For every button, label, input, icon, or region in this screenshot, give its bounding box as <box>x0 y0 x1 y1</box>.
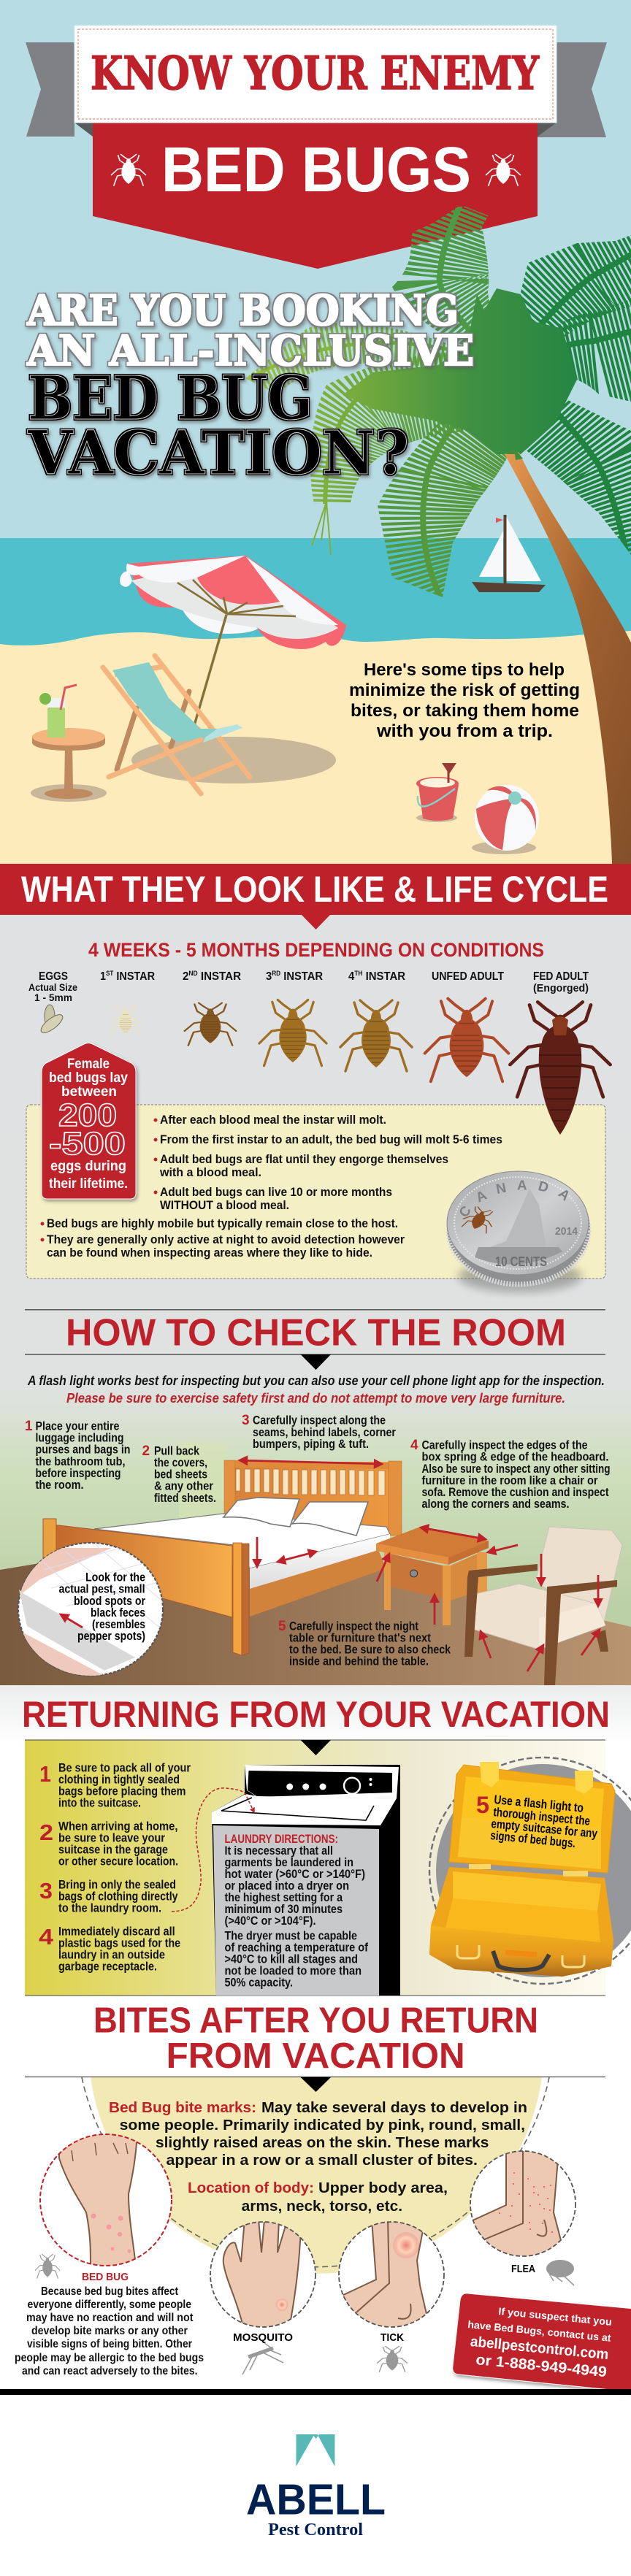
step 3 text <box>242 1413 396 1451</box>
icon: bed bug left <box>111 154 146 185</box>
stage labels: ST <box>106 970 114 977</box>
suitcase step text <box>476 1792 598 1850</box>
laundry directions: >40°C to kill all stages and <box>225 1952 358 1966</box>
returning steps: laundry in an outside <box>58 1948 165 1962</box>
returning steps: clothing in tightly sealed <box>58 1773 180 1787</box>
fact bullets: can be found when inspecting areas where they like to hide. <box>47 1246 372 1260</box>
stage labels: EGGS <box>39 970 68 983</box>
side table with drink <box>31 685 107 802</box>
sailboat <box>472 515 546 592</box>
step 4 text: 4 <box>410 1438 418 1453</box>
laundry directions: 50% capacity. <box>225 1976 293 1990</box>
step numbers <box>39 1761 54 1950</box>
bed bug bite note: everyone differently, some people <box>28 2299 191 2311</box>
callout: mattress closeup <box>15 1541 164 1676</box>
heading: bites after you return: FROM VACATION <box>167 2036 465 2076</box>
icon: bed bug on coin <box>460 1205 498 1234</box>
icon: second instar <box>185 1003 236 1046</box>
grey ribbon tails <box>26 42 607 137</box>
bed bug bite note: may have no reaction and will not <box>26 2312 194 2324</box>
panel: returning background <box>0 1685 631 1744</box>
panel: look and life cycle background <box>0 915 631 1686</box>
returning steps: When arriving at home, <box>58 1820 178 1833</box>
headline line 1: ARE YOU BOOKING <box>26 286 459 335</box>
laundry directions: minimum of 30 minutes <box>225 1902 343 1916</box>
stage labels: 4 <box>348 970 355 983</box>
step 1 text: the bathroom tub, <box>35 1455 126 1468</box>
bite marks text: arms, neck, torso, etc. <box>242 2199 402 2215</box>
stage labels: 1 <box>100 970 107 983</box>
bite marks text: slightly raised areas on the skin. These marks <box>156 2135 489 2151</box>
step 5 text: inside and behind the table. <box>289 1655 429 1668</box>
fact bullets <box>47 1113 502 1260</box>
callout: eggs laid: their lifetime. <box>49 1176 128 1192</box>
stage labels: UNFED ADULT <box>432 970 504 983</box>
coin with bed bug for scale <box>445 1171 592 1297</box>
laundry directions: of reaching a temperature of <box>225 1941 368 1955</box>
step numbers: 3 <box>39 1878 53 1904</box>
coin with bed bug for scale: CANADA <box>460 1180 568 1216</box>
step 4 text <box>410 1438 611 1511</box>
laundry directions: The dryer must be capable <box>225 1929 357 1943</box>
bite marks text: appear in a row or a small cluster of bites. <box>167 2153 478 2169</box>
step 5 text: 5 <box>278 1619 286 1634</box>
stage labels: INSTAR <box>280 970 323 983</box>
fact bullets: Adult bed bugs can live 10 or more months <box>160 1185 392 1199</box>
callout: eggs laid: eggs during <box>50 1159 126 1174</box>
step numbers: 1 <box>39 1761 51 1787</box>
fact bullets: WITHOUT a blood meal. <box>160 1198 289 1212</box>
intro text: minimize the risk of getting <box>349 681 580 700</box>
returning steps: be sure to leave your <box>58 1831 165 1845</box>
stage labels: 2 <box>183 970 189 983</box>
bucket and shovel <box>416 763 459 822</box>
callout: eggs laid: bed bugs lay <box>49 1070 128 1086</box>
laundry directions: the highest setting for a <box>225 1890 343 1904</box>
step 2 text: Pull back <box>154 1444 200 1457</box>
returning steps: plastic bags used for the <box>58 1936 180 1950</box>
icon: fed adult <box>510 1002 611 1135</box>
icon: tick <box>377 2346 408 2372</box>
stage labels: FED ADULT <box>533 970 589 983</box>
logo: abell pest control: ABELL <box>246 2475 386 2523</box>
suitcase step text: empty suitcase for any <box>491 1817 598 1841</box>
contact card <box>453 2293 631 2392</box>
coin with bed bug for scale: 2014 <box>555 1225 578 1238</box>
step 5 text <box>278 1619 451 1668</box>
returning steps: bags of clothing directly <box>58 1890 178 1904</box>
step 2 text: bed sheets <box>154 1468 207 1481</box>
step 3 text: Carefully inspect along the <box>253 1414 386 1427</box>
side rail <box>250 1550 386 1617</box>
step 5 text: table or furniture that's next <box>289 1632 431 1645</box>
suitcase step text: 5 <box>476 1792 489 1818</box>
returning steps: or other secure location. <box>58 1855 178 1868</box>
mattress top <box>94 1514 390 1568</box>
heading: know your enemy: KNOW YOUR ENEMY <box>91 46 540 100</box>
callout: eggs laid: Female <box>67 1057 110 1072</box>
icon: first instar <box>109 1005 142 1035</box>
coin with bed bug for scale: 10 CENTS <box>495 1254 547 1269</box>
label: flea: FLEA <box>511 2263 535 2275</box>
returning steps: bags before placing them <box>58 1785 186 1798</box>
heading: life cycle duration: 4 WEEKS - 5 MONTHS DEPENDING ON CONDITIONS <box>88 939 544 961</box>
returning steps: into the suitcase. <box>58 1796 141 1810</box>
stage labels: RD <box>272 970 281 977</box>
intro instructions <box>27 1373 605 1406</box>
callout: eggs laid: between <box>61 1084 117 1100</box>
returning steps: Bring in only the sealed <box>58 1878 176 1892</box>
contact card: abellpestcontrol.com <box>470 2334 609 2363</box>
label: tick: TICK <box>380 2331 404 2344</box>
logo mark <box>297 2434 334 2466</box>
contact card: If you suspect that you <box>498 2305 613 2328</box>
callout: mattress closeup: pepper spots) <box>77 1630 145 1643</box>
contact card: or 1-888-949-4949 <box>475 2352 608 2380</box>
headboard <box>235 1462 389 1535</box>
returning steps: to the laundry room. <box>58 1901 161 1915</box>
washing machine <box>172 1765 400 1996</box>
panel: returning <box>25 1740 605 1996</box>
step 2 text <box>142 1444 216 1505</box>
returning steps: suitcase in the garage <box>58 1843 168 1857</box>
mattress side <box>250 1534 390 1589</box>
bite circle: tick <box>339 2220 444 2333</box>
pillows <box>223 1498 299 1527</box>
label: bed bug: BED BUG <box>82 2271 129 2283</box>
stage labels: INSTAR <box>362 970 405 983</box>
floor <box>0 1563 631 1685</box>
step 2 text: & any other <box>154 1480 214 1493</box>
inspection arrows <box>240 1460 600 1671</box>
contact card: have Bed Bugs, contact us at <box>467 2318 612 2344</box>
step 4 text: box spring & edge of the headboard. <box>422 1451 609 1464</box>
step 1 text: luggage including <box>35 1432 124 1445</box>
bite circle: mosquito <box>210 2220 316 2333</box>
icon: mosquito <box>242 2343 283 2374</box>
stage labels: 1 - 5mm <box>34 992 72 1003</box>
bite marks text: some people. Primarily indicated by pink, round, small, <box>120 2117 525 2134</box>
headline line 4: VACATION? <box>27 418 409 488</box>
headline line 2: AN ALL-INCLUSIVE <box>26 326 474 375</box>
divider and heading: how to check the room: HOW TO CHECK THE ROOM <box>66 1311 566 1354</box>
icon: grey bed bug <box>35 2254 60 2278</box>
fact bullets: Adult bed bugs are flat until they engorge themselves <box>160 1152 448 1166</box>
icon: unfed adult <box>425 999 508 1081</box>
callout: mattress closeup: (resembles <box>92 1618 145 1631</box>
heading: bites after you return <box>93 2001 538 2076</box>
bed bug bite note: develop bite marks or any other <box>31 2325 188 2337</box>
illustration: armchair <box>464 1527 622 1685</box>
intro text: with you from a trip. <box>376 721 553 741</box>
stage labels: TH <box>354 970 362 977</box>
title ribbon <box>26 26 607 269</box>
step 1 text <box>25 1419 130 1492</box>
returning steps: garbage receptacle. <box>58 1960 157 1974</box>
logo: abell pest control: Pest Control <box>268 2521 363 2539</box>
callout: eggs laid: 200 <box>58 1097 117 1133</box>
icon: flea <box>546 2260 574 2285</box>
bite marks text: Bed Bug bite marks: <box>109 2100 256 2116</box>
bite marks text <box>109 2100 527 2215</box>
suitcase handle <box>505 1952 537 1955</box>
step 1 text: 1 <box>25 1419 33 1434</box>
callout: mattress closeup: Look for the <box>85 1571 145 1584</box>
fact bullets: Bed bugs are highly mobile but typically remain close to the host. <box>47 1216 398 1230</box>
suitcase step text: Use a flash light to <box>494 1793 584 1815</box>
step 2 text: the covers, <box>154 1457 207 1470</box>
step 3 text: bumpers, piping & tuft. <box>253 1438 369 1451</box>
heading: bed bugs: BED BUGS <box>161 134 471 205</box>
bite circle: flea <box>470 2150 575 2260</box>
step 2 text: 2 <box>142 1444 150 1459</box>
step 1 text: purses and bags in <box>35 1444 130 1457</box>
bite circle: bed bug <box>40 2132 172 2267</box>
laundry directions: garments be laundered in <box>225 1855 353 1869</box>
returning steps: Be sure to pack all of your <box>58 1761 191 1775</box>
step numbers: 2 <box>39 1820 53 1845</box>
open suitcase <box>429 1757 631 1984</box>
headline line 3: BED BUG <box>28 364 313 434</box>
step 3 text: 3 <box>242 1413 250 1428</box>
fact bullets: They are generally only active at night to avoid detection however <box>47 1233 405 1246</box>
beach umbrella <box>120 556 346 763</box>
beach ball <box>472 785 539 854</box>
label: mosquito: MOSQUITO <box>233 2331 293 2344</box>
panel: bed bug facts <box>26 1105 605 1279</box>
intro text <box>349 660 580 741</box>
deck chair <box>103 656 336 794</box>
suitcase step text: signs of bed bugs. <box>490 1828 576 1850</box>
step numbers: 4 <box>39 1924 54 1950</box>
headline: all-inclusive vacation <box>26 286 474 488</box>
divider and heading: how to check the room <box>25 1309 605 1370</box>
returning steps <box>39 1761 191 1974</box>
stage labels <box>28 970 589 1003</box>
stage labels: INSTAR <box>113 970 155 983</box>
illustration: night table <box>376 1527 489 1625</box>
bed bug bite note: people may be allergic to the bed bugs <box>15 2352 204 2364</box>
panel: beach scene <box>0 0 631 864</box>
fact bullets: From the first instar to an adult, the bed bug will molt 5-6 times <box>160 1132 502 1146</box>
icon: fourth instar <box>340 1000 412 1071</box>
laundry directions: It is necessary that all <box>225 1844 333 1858</box>
bite marks text: May take several days to develop in <box>261 2100 527 2116</box>
fact bullets: After each blood meal the instar will molt. <box>160 1113 386 1127</box>
step 1 text: the room. <box>35 1479 83 1492</box>
bed bug bite note: visible signs of being bitten. Other <box>27 2338 192 2350</box>
intro text: bites, or taking them home <box>351 701 579 721</box>
step 1 text: before inspecting <box>35 1467 121 1480</box>
step 5 text: Carefully inspect the night <box>289 1619 418 1633</box>
step 1 text: Place your entire <box>35 1420 120 1433</box>
icon: bed bug right <box>486 154 521 185</box>
red pennant <box>93 123 538 269</box>
callout: mattress closeup: blood spots or <box>74 1595 145 1608</box>
callout: eggs laid <box>42 1043 136 1199</box>
heading: bites after you return: BITES AFTER YOU RETURN <box>93 2001 538 2040</box>
step 2 text: fitted sheets. <box>154 1492 216 1505</box>
footboard <box>53 1525 232 1617</box>
callout: mattress closeup: actual pest, small <box>58 1583 145 1596</box>
bite marks text: Location of body: <box>188 2180 314 2196</box>
stitched border <box>78 29 553 119</box>
stage labels: INSTAR <box>198 970 241 983</box>
footer bar <box>0 2389 631 2395</box>
step 4 text: Carefully inspect the edges of the <box>422 1439 587 1452</box>
white title plate <box>74 26 557 123</box>
palm tree <box>245 207 631 864</box>
stage labels: 3 <box>266 970 272 983</box>
panel: bite marks backdrop <box>25 2077 605 2274</box>
intro text: Here's some tips to help <box>364 660 565 680</box>
laundry directions: not be loaded to more than <box>225 1964 362 1978</box>
step 3 text: seams, behind labels, corner <box>253 1426 396 1439</box>
returning steps: Immediately discard all <box>58 1925 175 1939</box>
icon: third instar <box>259 1000 326 1066</box>
laundry directions: or placed into a dryer on <box>225 1879 349 1893</box>
bed bug bite note <box>15 2285 204 2377</box>
laundry directions: hot water (>60°C or >140°F) <box>225 1867 365 1881</box>
callout: eggs laid: -500 <box>49 1126 126 1162</box>
intro instructions: Please be sure to exercise safety first and do not attempt to move very large furniture. <box>66 1391 565 1406</box>
callout: mattress closeup: black feces <box>91 1606 145 1619</box>
bite marks text: Upper body area, <box>318 2180 448 2196</box>
step 5 text: to the bed. Be sure to also check <box>289 1644 451 1657</box>
step 4 text: along the corners and seams. <box>422 1498 570 1511</box>
icon: eggs <box>39 1005 65 1036</box>
laundry directions: LAUNDRY DIRECTIONS: <box>225 1832 338 1846</box>
laundry directions: (>40°C or >104°F). <box>225 1914 316 1928</box>
bed bug bite note: and can react adversely to the bites. <box>22 2365 197 2377</box>
stage labels: (Engorged) <box>533 982 589 994</box>
laundry directions <box>225 1832 368 1990</box>
stage labels: Actual Size <box>28 981 77 993</box>
fact bullets: with a blood meal. <box>159 1165 261 1179</box>
logo: abell pest control <box>246 2434 386 2539</box>
illustration: bed <box>43 1460 402 1655</box>
stage labels: ND <box>188 970 198 977</box>
step 4 text: furniture in the room like a chair or <box>422 1474 598 1487</box>
bed bug bite note: Because bed bug bites affect <box>41 2285 179 2298</box>
banner: what they look like <box>0 864 631 929</box>
suitcase step text: thorough inspect the <box>493 1805 591 1828</box>
